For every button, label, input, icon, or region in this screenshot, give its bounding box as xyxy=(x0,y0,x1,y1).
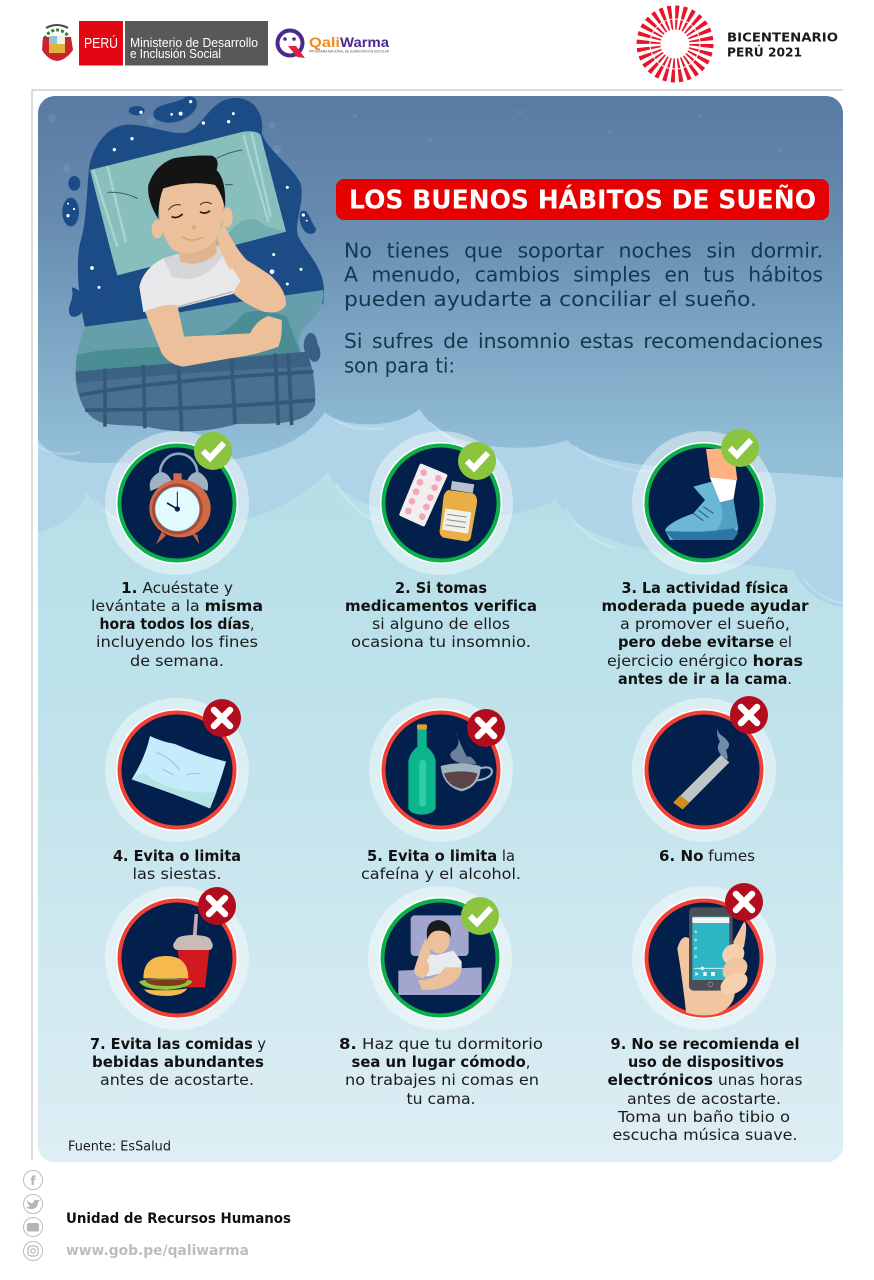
item 8 text xyxy=(339,1035,543,1108)
icon: cigarette xyxy=(673,724,729,809)
item 9 text xyxy=(608,1035,803,1144)
item 3 text xyxy=(602,579,809,688)
icon: check badge xyxy=(721,429,759,467)
intro text: Si sufres de insomnio estas recomendaciones xyxy=(344,329,823,353)
item 9 text: 9. No se recomienda el xyxy=(610,1035,800,1053)
item 4 text: 4. Evita o limita xyxy=(113,847,241,865)
item 6: cigarette xyxy=(632,696,776,842)
header logos xyxy=(42,12,838,76)
item 2 text xyxy=(345,579,537,651)
logo: PERÚ ministry: Ministerio de Desarrollo xyxy=(130,36,258,50)
icon: instagram xyxy=(24,1242,42,1260)
item 7 text xyxy=(90,1035,266,1089)
footer: website: www.gob.pe/qaliwarma xyxy=(66,1243,249,1259)
icon: burger and drink xyxy=(139,914,213,996)
item 9: phone xyxy=(632,883,776,1030)
item 4 text: las siestas. xyxy=(132,865,222,883)
intro text: A menudo, cambios simples en tus hábitos xyxy=(344,262,823,286)
night blob xyxy=(78,98,324,327)
logo: PERÚ ministry: e Inclusión Social xyxy=(130,47,221,61)
intro text: No tienes que soportar noches sin dormir. xyxy=(344,238,823,262)
item 7 text: antes de acostarte. xyxy=(100,1071,254,1089)
man arm and shirt xyxy=(177,245,286,312)
item 5 text: cafeína y el alcohol. xyxy=(361,865,521,883)
plaid blanket xyxy=(76,352,315,431)
item 9 text: uso de dispositivos xyxy=(628,1053,784,1071)
man head xyxy=(178,233,217,264)
item 5 text xyxy=(361,847,521,883)
item 2 text: ocasiona tu insomnio. xyxy=(351,633,531,651)
item 1: alarm clock xyxy=(105,431,249,575)
stars xyxy=(66,100,308,289)
item 4: pillow xyxy=(105,698,249,842)
item 1 text: incluyendo los fines xyxy=(96,633,258,651)
item 8 text: no trabajes ni comas en xyxy=(345,1071,539,1089)
item 2 text: si alguno de ellos xyxy=(372,615,510,633)
icon: x badge xyxy=(198,887,236,925)
item 9 text: Toma un baño tibio o xyxy=(617,1108,790,1126)
blanket xyxy=(76,290,324,377)
icon: pillow xyxy=(132,736,226,808)
item 2 text: 2. Si tomas xyxy=(395,579,487,597)
text: Bicentenario Perú 2021: PERÚ 2021 xyxy=(727,44,802,60)
item 2 text: medicamentos verifica xyxy=(345,597,537,615)
icon: x badge xyxy=(203,699,241,737)
icon: check badge xyxy=(461,897,499,935)
icon: pills and bottle xyxy=(401,466,477,541)
item 9 text: antes de acostarte. xyxy=(627,1090,781,1108)
source note: Fuente: EsSalud xyxy=(68,1140,171,1154)
intro text: pueden ayudarte a conciliar el sueño. xyxy=(344,287,757,311)
item 1 text xyxy=(91,579,263,670)
item 8 text: sea un lugar cómodo, xyxy=(352,1053,530,1071)
icon: twitter xyxy=(24,1194,42,1214)
icon: leg and shoe xyxy=(665,448,738,540)
intro text xyxy=(344,238,823,378)
illustration: sleeping man xyxy=(62,96,324,432)
logo: Qali Warma: Qali xyxy=(309,34,340,50)
text: Bicentenario Perú 2021 xyxy=(727,30,838,60)
footer: unit name: Unidad de Recursos Humanos xyxy=(66,1211,291,1227)
icon: check badge xyxy=(194,432,232,470)
item 9 text: electrónicos unas horas xyxy=(608,1071,803,1089)
item 3 text: ejercicio enérgico horas xyxy=(607,652,803,670)
item 5 text: 5. Evita o limita la xyxy=(367,847,515,865)
pillow xyxy=(90,131,286,275)
item 1 text: 1. Acuéstate y xyxy=(121,579,233,597)
item 8 text: 8. Haz que tu dormitorio xyxy=(339,1035,543,1053)
item 8 text: tu cama. xyxy=(406,1090,476,1108)
icon: hand holding phone xyxy=(677,907,752,1018)
icon: x badge xyxy=(467,709,505,747)
icon: man in bed xyxy=(398,915,482,995)
icon: x badge xyxy=(725,883,763,921)
item 1 text: de semana. xyxy=(130,652,224,670)
item 9 text: escucha música suave. xyxy=(612,1126,798,1144)
icon: Peru coat of arms xyxy=(42,25,73,61)
item 3 text: antes de ir a la cama. xyxy=(618,670,792,688)
item 1 text: levántate a la misma xyxy=(91,597,263,615)
panel: main background xyxy=(38,96,843,1162)
text: Bicentenario Perú 2021: BICENTENARIO xyxy=(727,30,838,44)
intro text: son para ti: xyxy=(344,354,455,378)
icon: x badge xyxy=(730,696,768,734)
logo: PERÚ ministry: PERÚ xyxy=(84,35,118,52)
social icons xyxy=(24,1170,42,1260)
item 3 text: a promover el sueño, xyxy=(620,615,790,633)
icon: check badge xyxy=(458,442,496,480)
item 1 text: hora todos los días, xyxy=(100,615,254,633)
item 8: comfortable bedroom xyxy=(368,886,512,1030)
small blobs xyxy=(62,96,320,362)
item 3 text: 3. La actividad física xyxy=(622,579,788,597)
item 7 text: bebidas abundantes xyxy=(92,1053,264,1071)
icon: bottle and cup xyxy=(408,724,492,815)
logo: Qali Warma xyxy=(278,30,389,58)
item 6 text: 6. No fumes xyxy=(659,847,755,865)
logo: PERÚ ministry xyxy=(79,21,268,66)
logo: Qali Warma: PROGRAMA NACIONAL DE ALIMENTACIÓN ESCOLAR xyxy=(309,48,389,54)
logo: Bicentenario sunburst xyxy=(643,12,707,76)
item 7 text: 7. Evita las comidas y xyxy=(90,1035,266,1053)
icon: youtube xyxy=(24,1218,42,1236)
title banner: LOS BUENOS HÁBITOS DE SUEÑO xyxy=(349,186,816,216)
item 3 text: pero debe evitarse el xyxy=(618,633,792,651)
item 4 text xyxy=(113,847,241,883)
icon: facebook: f xyxy=(30,1174,36,1188)
item 7: fast food xyxy=(105,886,249,1030)
item 3 text: moderada puede ayudar xyxy=(602,597,809,615)
item 3: exercise shoe xyxy=(632,429,776,575)
item 5: alcohol and coffee xyxy=(369,698,513,842)
logo: Qali Warma: Warma xyxy=(340,34,389,50)
icon: alarm clock xyxy=(149,454,211,544)
item 2: medicine xyxy=(369,431,513,575)
